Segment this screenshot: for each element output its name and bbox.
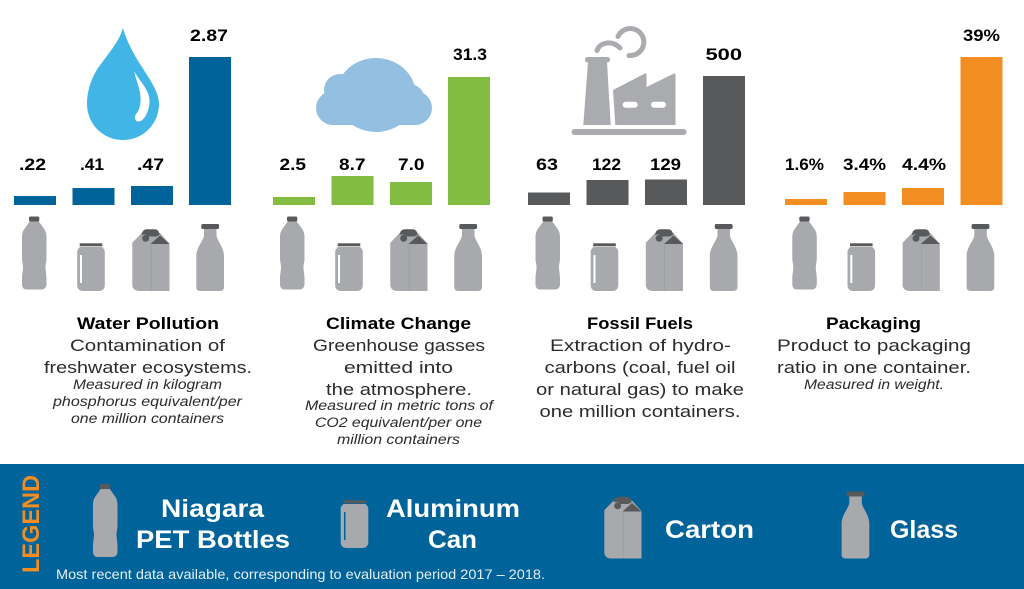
values: water pollution: [19, 26, 228, 174]
values: water pollution: .47: [137, 155, 164, 174]
text: climate change description: the atmosphere.: [326, 380, 472, 399]
panel: packaging: [777, 26, 1002, 392]
legend item: PET bottle: PET Bottles: [136, 526, 290, 554]
bar chart: climate change: [273, 77, 490, 205]
legend item: aluminum can: [341, 495, 520, 554]
values: fossil fuels: 122: [592, 155, 621, 174]
text: water pollution description: Contamination of: [70, 336, 225, 355]
legend item: PET bottle: Niagara: [161, 495, 265, 523]
values: fossil fuels: 500: [706, 45, 742, 64]
text: water pollution description: one million containers: [71, 411, 224, 426]
text: fossil fuels description: Extraction of hydro-: [550, 336, 731, 355]
text: climate change description: Greenhouse gasses: [313, 336, 485, 355]
legend heading: LEGEND: [18, 475, 45, 573]
text: climate change description: CO2 equivalent/per one: [315, 415, 482, 430]
bar chart: fossil fuels: [528, 76, 745, 205]
text: fossil fuels description: carbons (coal, fuel oil: [544, 358, 736, 377]
icon: water drop: [87, 28, 159, 140]
values: water pollution: .22: [19, 155, 46, 174]
values: climate change: 2.5: [280, 155, 306, 174]
values: packaging: 1.6%: [785, 155, 824, 174]
text: fossil fuels description: or natural gas) to make: [536, 380, 744, 399]
values: packaging: 3.4%: [843, 155, 886, 174]
text: water pollution description: phosphorus equivalent/per: [52, 394, 243, 409]
panel: fossil fuels: [528, 29, 745, 421]
values: fossil fuels: [536, 45, 742, 174]
panel: climate change: [273, 45, 494, 447]
text: fossil fuels description: one million containers.: [540, 402, 740, 421]
values: packaging: [785, 26, 1000, 174]
text: water pollution description: Water Pollution: [77, 315, 219, 333]
text: water pollution description: Measured in kilogram: [73, 377, 222, 392]
values: fossil fuels: 129: [650, 155, 681, 174]
text: climate change description: [305, 315, 494, 447]
legend item: carton: Carton: [665, 516, 754, 544]
text: packaging description: [777, 315, 971, 392]
icon: factory: [572, 29, 686, 135]
values: climate change: 31.3: [453, 45, 487, 64]
icons: containers for fossil fuels: [536, 216, 738, 291]
text: water pollution description: freshwater ecosystems.: [44, 358, 252, 377]
icons: containers for water pollution: [22, 216, 224, 291]
values: packaging: 39%: [963, 26, 1000, 45]
icons: containers for packaging: [792, 216, 994, 291]
values: climate change: 8.7: [339, 155, 366, 174]
values: fossil fuels: 63: [536, 155, 558, 174]
text: packaging description: Product to packaging: [777, 336, 971, 355]
legend item: aluminum can: Aluminum: [386, 495, 520, 523]
values: climate change: 7.0: [398, 155, 424, 174]
legend item: PET bottle: [93, 484, 290, 557]
text: fossil fuels description: [536, 315, 744, 421]
legend item: aluminum can: Can: [428, 526, 477, 554]
text: climate change description: Climate Change: [326, 315, 471, 333]
legend item: glass: [842, 492, 958, 558]
text: water pollution description: [44, 315, 252, 426]
legend item: carton: [604, 497, 754, 558]
values: climate change: [280, 45, 487, 174]
values: packaging: 4.4%: [902, 155, 946, 174]
text: packaging description: Packaging: [826, 315, 921, 333]
values: water pollution: 2.87: [190, 26, 228, 45]
footnote: Most recent data available, corresponding to evaluation period 2017 – 2018.: [56, 566, 545, 582]
legend item: glass: Glass: [890, 516, 958, 544]
bar chart: water pollution: [14, 57, 231, 205]
text: packaging description: ratio in one container.: [777, 358, 971, 377]
values: water pollution: .41: [80, 155, 104, 174]
icon: cloud: [316, 58, 432, 132]
panel: legend: [0, 464, 1024, 589]
text: climate change description: emitted into: [344, 358, 453, 377]
text: climate change description: million containers: [337, 432, 460, 447]
text: fossil fuels description: Fossil Fuels: [587, 315, 693, 333]
text: climate change description: Measured in metric tons of: [305, 398, 494, 413]
text: packaging description: Measured in weight.: [804, 377, 944, 392]
icons: containers for climate change: [280, 216, 482, 291]
bar chart: packaging: [785, 57, 1002, 205]
panel: water pollution: [14, 26, 252, 426]
